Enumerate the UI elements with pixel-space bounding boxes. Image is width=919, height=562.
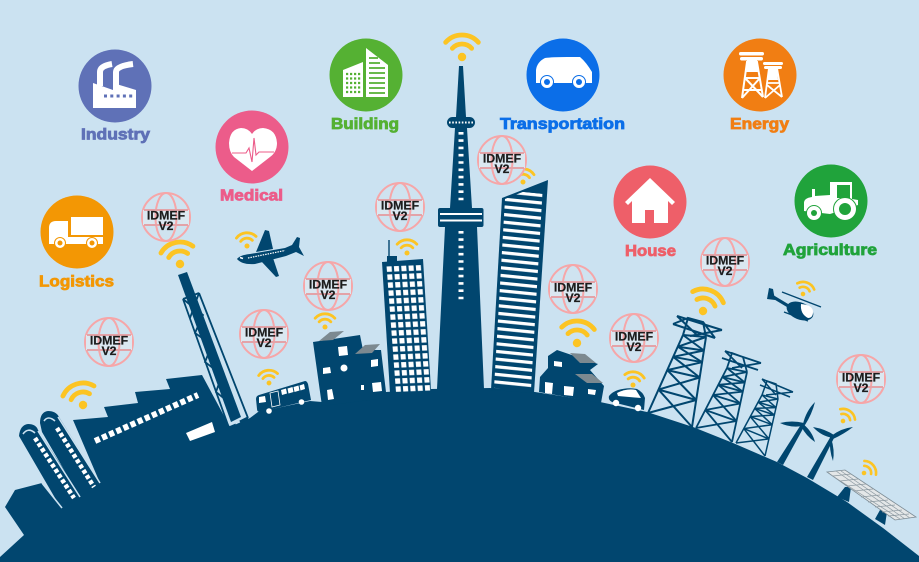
helicopter (767, 288, 821, 324)
globe badge 8 (610, 314, 658, 362)
house with solar roof (539, 350, 604, 403)
category: transportation (500, 38, 625, 133)
globe badge 8: V2 (626, 340, 642, 354)
globe badge 6: V2 (494, 162, 510, 176)
chimney with truss (178, 272, 248, 428)
globe badge 4: IDMEF (309, 278, 348, 292)
globe badge 3: V2 (256, 336, 272, 350)
globe badge 1 (142, 193, 190, 241)
ground dome with factory silhouette (0, 375, 919, 562)
category: house: House (625, 243, 676, 260)
category: house (614, 166, 686, 260)
category: agriculture: Agriculture (783, 242, 877, 259)
globe badge 10: IDMEF (842, 370, 881, 384)
power tower 1 (648, 316, 722, 427)
category: medical (216, 110, 288, 204)
central tower (437, 66, 484, 389)
globe badge 5: V2 (392, 209, 408, 223)
power tower 2 (696, 351, 761, 442)
category: energy: Energy (730, 116, 789, 133)
globe badge 2 (85, 318, 133, 366)
category: building (330, 38, 402, 133)
category: logistics: Logistics (39, 274, 114, 290)
globe badge 8: IDMEF (615, 330, 654, 344)
globe badge 6 (478, 136, 526, 184)
silos (19, 411, 101, 510)
factory windows (95, 395, 215, 441)
slanted striped skyscraper (491, 180, 548, 399)
category: medical: Medical (220, 188, 283, 204)
category: agriculture (783, 164, 877, 259)
globe badge 4: V2 (320, 288, 336, 302)
globe badge 3: IDMEF (245, 326, 284, 340)
globe badge 6: IDMEF (483, 152, 522, 166)
tall building with window grid (382, 240, 432, 394)
power tower 3 (736, 379, 793, 456)
building cluster with solar roofs (313, 331, 387, 406)
globe badge 2: V2 (101, 344, 117, 358)
category: energy (724, 38, 796, 133)
globe badge 4 (304, 262, 352, 310)
globe badge 10: V2 (853, 381, 869, 395)
category: industry: Industry (81, 126, 150, 144)
globe badge 1: IDMEF (147, 208, 186, 222)
globe badge 5: IDMEF (381, 198, 420, 212)
globe badge 10 (837, 355, 885, 403)
globe badge 2: IDMEF (90, 334, 129, 348)
solar panels (827, 470, 916, 525)
category: industry (78, 50, 152, 144)
category: building: Building (331, 116, 399, 133)
globe badge 7: IDMEF (554, 280, 593, 294)
globe badge 9 (701, 238, 749, 286)
airplane (237, 230, 304, 277)
globe badge 1: V2 (158, 219, 174, 233)
globe badge 9: IDMEF (706, 254, 745, 268)
category: transportation: Transportation (500, 116, 625, 133)
car (609, 388, 645, 411)
globe badge 7: V2 (565, 291, 581, 305)
globe badge 9: V2 (717, 264, 733, 278)
globe badge 5 (376, 183, 424, 231)
category: logistics (39, 196, 114, 290)
wind turbines (777, 402, 853, 480)
bus (256, 381, 311, 414)
globe badge 7 (549, 265, 597, 313)
wifi signals (61, 35, 879, 481)
globe badge 3 (240, 310, 288, 358)
